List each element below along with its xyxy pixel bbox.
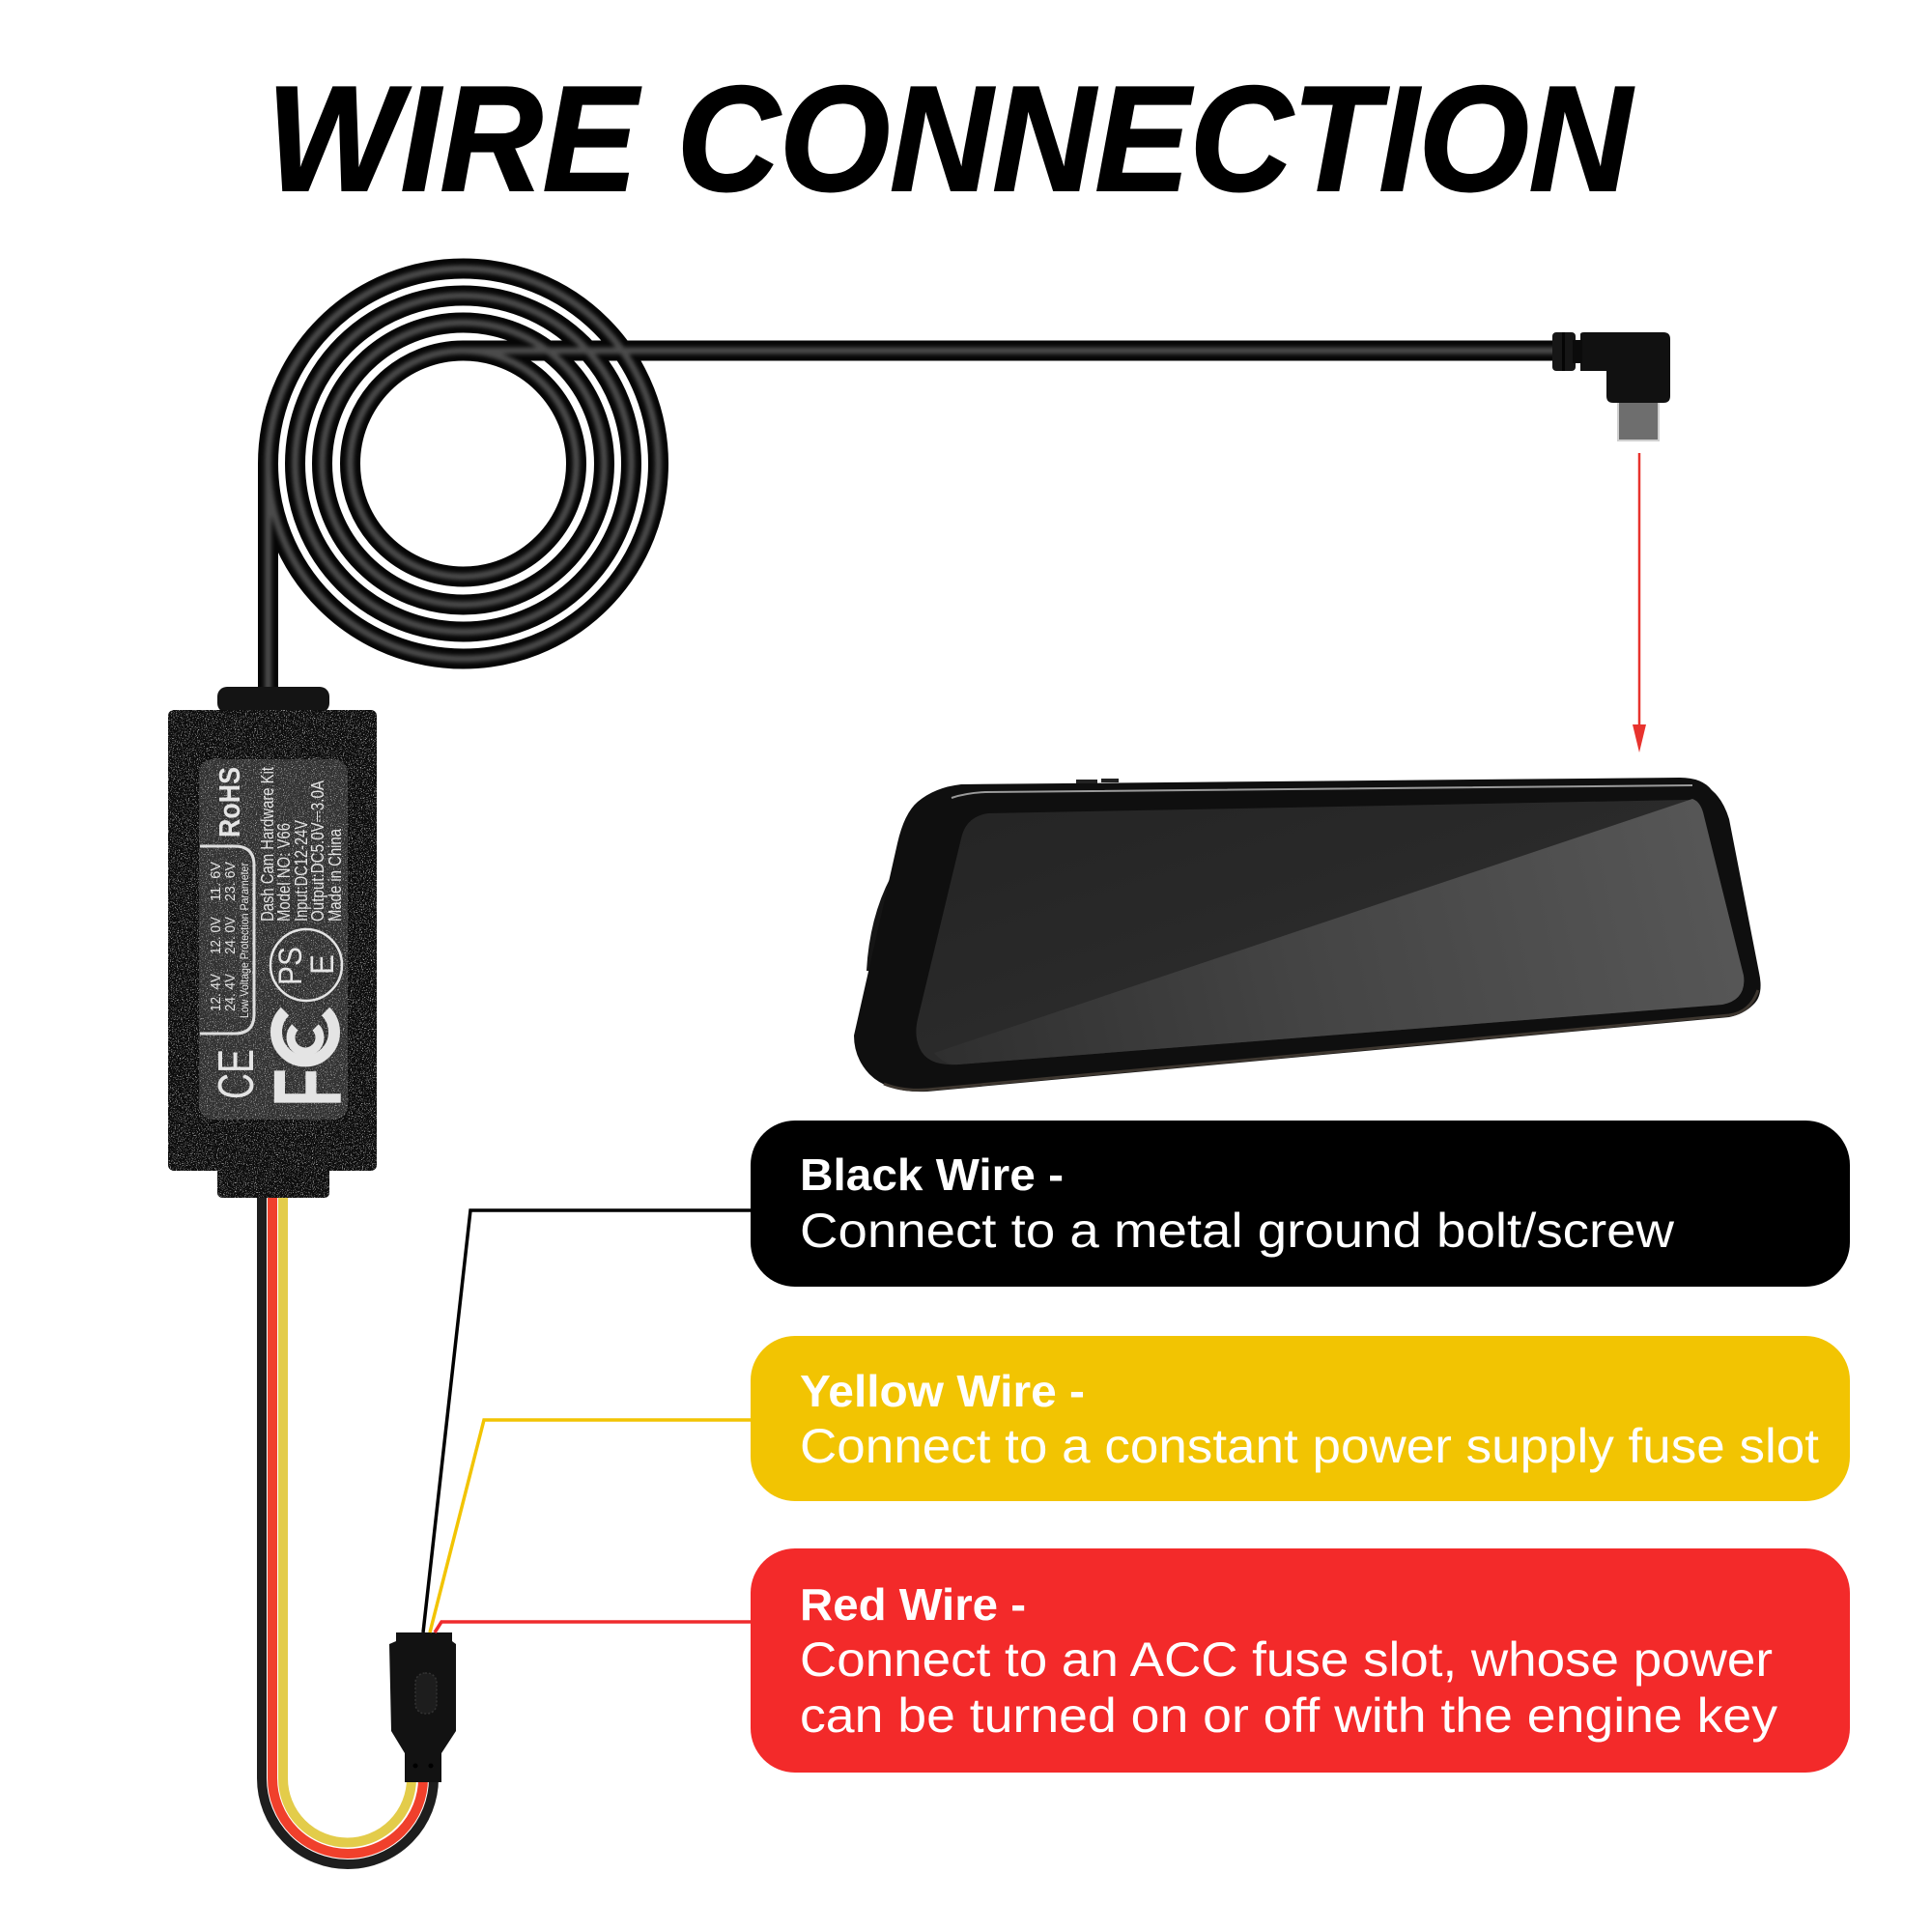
callout: black wire: Connect to a metal ground bolt/screw xyxy=(800,1204,1675,1258)
label text: Input:DC12-24V xyxy=(292,820,311,922)
plug metal tip xyxy=(1618,402,1659,440)
callout: black wire: Black Wire - xyxy=(800,1149,1064,1200)
top highlight xyxy=(952,785,1692,798)
plug housing xyxy=(1580,332,1670,403)
box body xyxy=(168,710,377,1171)
label plate xyxy=(199,759,348,1120)
label text: 12. 0V xyxy=(208,917,224,954)
rear mount bulge xyxy=(867,877,891,971)
leader line: black wire xyxy=(423,1210,753,1632)
callout: red wire: Connect to an ACC fuse slot, whose power xyxy=(800,1632,1773,1687)
label text: PS xyxy=(272,947,309,985)
top collar xyxy=(217,687,329,713)
callout: yellow wire: Connect to a constant power supply fuse slot xyxy=(800,1419,1819,1473)
callout: black wire xyxy=(751,1121,1850,1287)
callout: red wire xyxy=(751,1548,1850,1773)
strain relief xyxy=(1552,332,1576,371)
coiled power cable xyxy=(269,269,1565,695)
callout: yellow wire: Yellow Wire - xyxy=(800,1366,1085,1416)
callout: red wire: Red Wire - xyxy=(800,1579,1026,1630)
inline connector xyxy=(389,1632,456,1782)
label text: RoHS xyxy=(213,767,246,837)
label text: Low Voltage Protection Parameter xyxy=(240,863,251,1018)
low voltage frame xyxy=(200,846,254,1034)
screen glare xyxy=(934,799,1744,1064)
red arrow to mirror xyxy=(1633,453,1646,752)
label text: F xyxy=(254,1068,362,1107)
connector grip xyxy=(415,1673,437,1714)
label text: 24. 0V xyxy=(222,917,239,954)
mirror dash cam xyxy=(854,778,1761,1092)
label text: 11. 6V xyxy=(208,862,224,901)
label text: 23. 6V xyxy=(222,862,239,901)
title: WIRE CONNECTION xyxy=(267,55,1634,222)
label text: Dash Cam Hardware Kit xyxy=(258,767,277,922)
tri-colour wire U loop xyxy=(262,1198,434,1864)
label text: E xyxy=(304,954,341,975)
label text: Output:DC5.0V⎓3.0A xyxy=(308,781,327,922)
bottom collar xyxy=(217,1167,329,1198)
label text: 24. 4V xyxy=(222,974,239,1011)
hardware kit box xyxy=(168,687,377,1198)
callout: yellow wire xyxy=(751,1336,1850,1501)
mirror body xyxy=(854,778,1761,1092)
leader line: yellow wire xyxy=(430,1420,753,1632)
leader line: red wire xyxy=(435,1622,753,1632)
callout: red wire: can be turned on or off with the engine key xyxy=(800,1689,1777,1743)
USB-C right-angle plug xyxy=(1552,332,1670,440)
label text xyxy=(208,767,362,1107)
label text: Model NO: V66 xyxy=(274,823,294,922)
label text: 12. 4V xyxy=(208,974,224,1011)
screen xyxy=(916,800,1744,1064)
label text: CE xyxy=(209,1049,265,1099)
label text: Made in China xyxy=(326,828,345,922)
bottom edge highlight xyxy=(884,990,1758,1090)
